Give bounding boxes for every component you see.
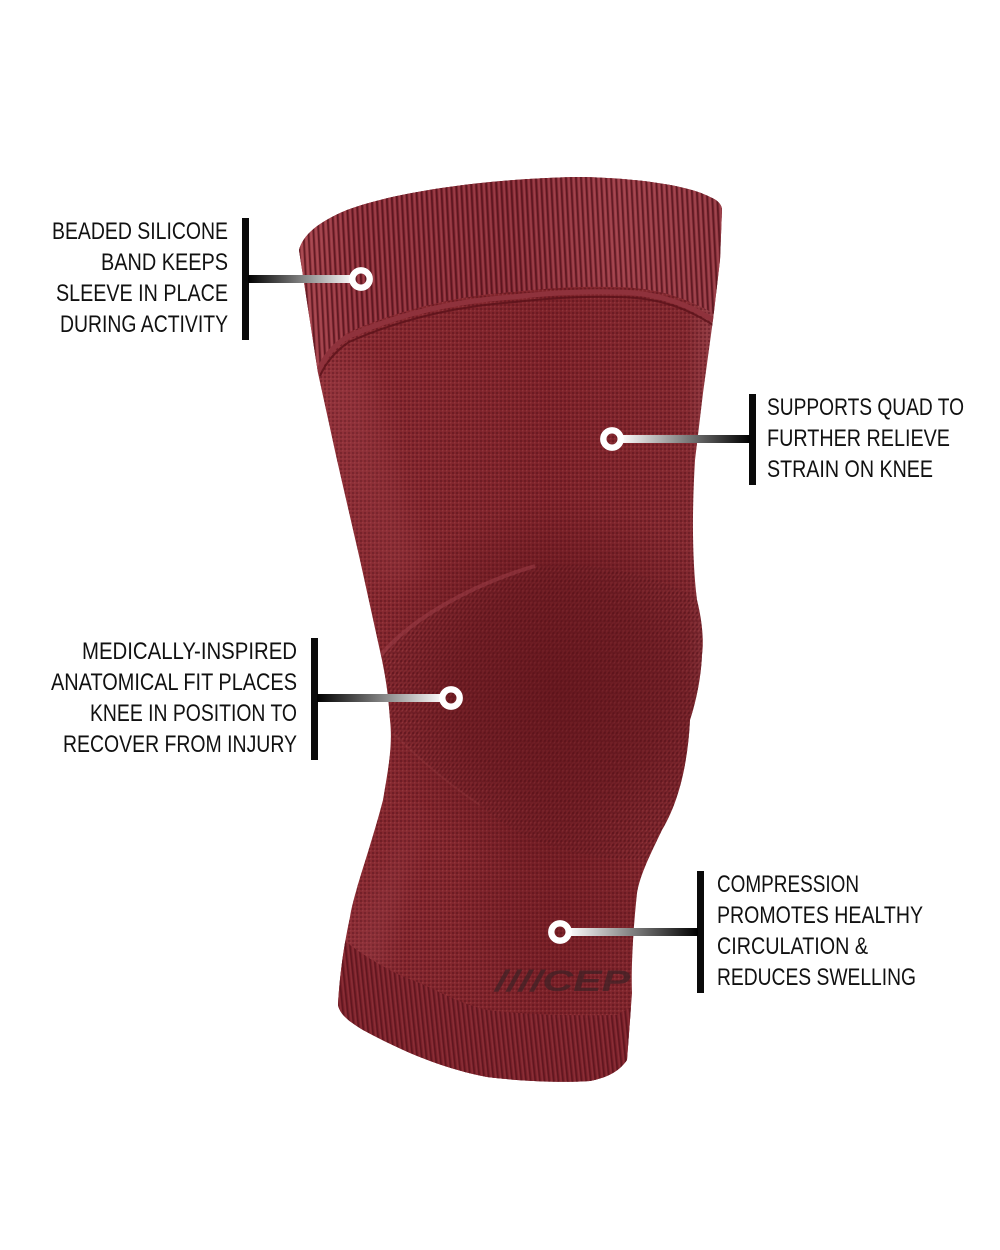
callout: supports quad — [603, 394, 964, 485]
text: supports quad: STRAIN ON KNEE — [767, 456, 933, 483]
text: beaded silicone band: BAND KEEPS — [101, 249, 228, 276]
upper panel light — [337, 380, 408, 574]
text: compression: REDUCES SWELLING — [717, 964, 916, 991]
bracket bar — [242, 218, 249, 340]
leader line — [317, 694, 444, 702]
marker — [551, 923, 569, 941]
band seam — [318, 292, 713, 372]
text: anatomical fit: MEDICALLY-INSPIRED — [82, 638, 297, 665]
leader line — [248, 275, 354, 283]
text: supports quad: FURTHER RELIEVE — [767, 425, 950, 452]
callout: compression — [551, 871, 923, 993]
bracket bar — [697, 871, 704, 993]
text: beaded silicone band: SLEEVE IN PLACE — [56, 280, 228, 307]
bracket bar — [311, 638, 318, 760]
text: beaded silicone band — [52, 218, 228, 338]
knee shading — [398, 534, 703, 844]
text: anatomical fit: ANATOMICAL FIT PLACES — [51, 669, 297, 696]
text: compression: PROMOTES HEALTHY — [717, 902, 923, 929]
callout: anatomical fit — [51, 638, 460, 760]
bottom ribbed band — [338, 942, 631, 1082]
text: compression — [717, 871, 923, 991]
lower leg shading — [360, 880, 394, 962]
marker — [603, 430, 621, 448]
leader line — [568, 928, 698, 936]
text: supports quad — [767, 394, 964, 483]
leader line — [620, 435, 750, 443]
text: beaded silicone band: DURING ACTIVITY — [60, 311, 228, 338]
text: anatomical fit: KNEE IN POSITION TO — [90, 700, 297, 727]
top ribbed band — [290, 170, 730, 370]
infographic: knee sleeve with four callouts — [51, 177, 964, 1082]
sleeve base fabric — [290, 170, 730, 1090]
text: beaded silicone band: BEADED SILICONE — [52, 218, 228, 245]
text: compression: CIRCULATION & — [717, 933, 868, 960]
knee panel seam — [381, 566, 535, 655]
logo on sleeve: ////CEP — [492, 965, 631, 998]
marker — [352, 270, 370, 288]
knee sleeve — [290, 170, 750, 1090]
bracket bar — [749, 394, 756, 485]
callout: beaded silicone band — [52, 218, 370, 340]
marker — [442, 689, 460, 707]
text: compression: COMPRESSION — [717, 871, 859, 898]
text: anatomical fit: RECOVER FROM INJURY — [63, 731, 297, 758]
knee panel texture — [381, 565, 720, 860]
text: anatomical fit — [51, 638, 297, 758]
